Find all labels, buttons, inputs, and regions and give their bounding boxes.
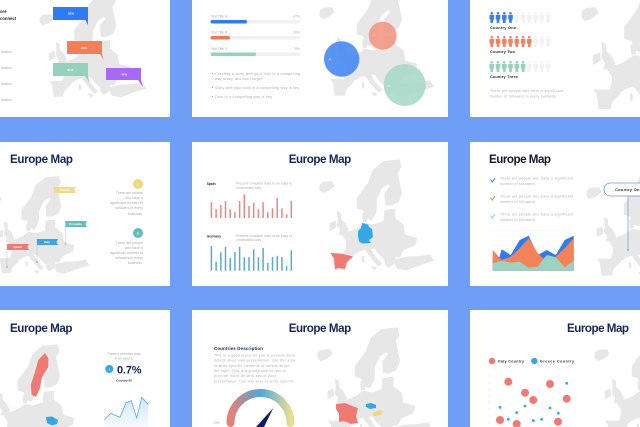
pictogram row: Country Two: Country Two [490, 50, 516, 54]
badge C: C [137, 182, 140, 186]
map of Europe [582, 0, 640, 109]
bullet list [212, 72, 300, 99]
bullet list: Story with your dots in a compelling way is key. [215, 86, 300, 90]
map of Europe [320, 160, 433, 270]
highlight: Germany [358, 223, 373, 244]
highlight: Hungary [372, 410, 383, 416]
bullet list: way is key, and don't forget. [215, 77, 263, 81]
text block C: followers in every [115, 206, 143, 210]
bar chart: Germany [211, 246, 291, 271]
bullet list: Dots in a compelling way is key. [215, 95, 273, 99]
left text labels: rmation [1, 50, 12, 54]
callout: blue [53, 7, 88, 25]
flag: France [54, 187, 76, 193]
panel: checklist and area chart [470, 142, 640, 286]
checklist [490, 178, 495, 218]
callout: Country One [604, 183, 640, 251]
chart heading: Germany: understand way. [236, 238, 262, 242]
scatter: Italy points [496, 378, 571, 427]
bar: title B [210, 30, 300, 40]
chart heading: Germany: Present complete data in an easy to [236, 234, 292, 238]
left text labels: rmation [1, 98, 12, 102]
chart heading: Spain: understand way. [236, 186, 262, 190]
description text: number of followers in every business. [490, 94, 557, 98]
area chart [493, 231, 574, 271]
flag: France: France [60, 188, 70, 192]
heading fragment: ore [0, 9, 7, 14]
callout: purple: 47% [121, 72, 127, 76]
text block C [110, 191, 143, 216]
flag: Italy [36, 239, 58, 263]
title: Europe Map [10, 153, 73, 166]
checklist text: number of followers. [500, 200, 536, 204]
description text: presentation. Use this area to write specific. [214, 380, 295, 384]
title: Europe Map [489, 153, 551, 166]
map of Europe [0, 177, 89, 273]
stat text: Present complete data [108, 352, 141, 356]
chart heading: Germany: Germany [207, 234, 221, 238]
title: Europe Map [289, 322, 351, 335]
title: Europe Map [289, 153, 351, 166]
bubble: orange [369, 22, 397, 50]
description text [490, 89, 563, 98]
flag: Spain [6, 244, 29, 268]
line chart [104, 397, 148, 427]
callout: green: 61% [67, 68, 74, 72]
description text: This is a good place for you to provide more [214, 354, 295, 358]
bar: title A [210, 14, 300, 24]
map of Europe [587, 166, 640, 276]
badge D: D [137, 232, 140, 236]
flag: Romania [65, 221, 87, 245]
badge D [133, 228, 143, 238]
left text labels: rmation [1, 66, 12, 70]
description text [214, 354, 295, 384]
map of Europe [0, 345, 89, 427]
bubble: green [384, 64, 426, 106]
description text: provide more details about your [214, 374, 277, 378]
gauge: 70% [213, 421, 220, 425]
callout: green [53, 63, 90, 83]
highlight: Czechia [366, 403, 376, 409]
highlight: France [336, 403, 358, 424]
callout: purple [106, 68, 143, 87]
description text: the topic. This is a good place for you to [214, 369, 286, 373]
text block C: business. [128, 212, 143, 216]
text block D: who have a [125, 246, 143, 250]
bar: title B: 20% [293, 30, 300, 34]
badge C [133, 179, 143, 189]
title: Europe Map [567, 322, 629, 335]
panel: scatter chart [470, 310, 640, 427]
panel: highlight with stat and line chart [0, 310, 170, 427]
chart heading: Spain: Present complete data in an easy to [236, 182, 292, 186]
bar: title C: Text Title C [211, 47, 228, 51]
pictogram row: Country Three [490, 61, 550, 79]
bar: title C: 70% [293, 47, 300, 51]
description heading: Countries Description [214, 346, 263, 351]
flag: Italy: Italy [44, 240, 50, 244]
text block D: significant number of [110, 251, 143, 255]
panel: flags on map [0, 142, 170, 286]
map of Europe [40, 0, 145, 97]
scatter axis [488, 376, 490, 423]
highlight: Romania [46, 416, 58, 426]
stat caption: Country 00 [116, 378, 132, 382]
gauge [213, 393, 290, 427]
panel: pictograms [470, 0, 640, 117]
chart heading: Germany [207, 234, 292, 242]
bar chart: Spain [211, 194, 291, 218]
map of Europe [595, 328, 640, 427]
pictogram row: Country One: Country One [490, 26, 516, 30]
panel: description and gauge [192, 310, 448, 427]
callout: orange [67, 41, 104, 60]
stat text [108, 352, 141, 360]
flag: Spain: Spain [13, 245, 22, 249]
text block D: business. [128, 261, 143, 265]
pictogram row: Country Two [490, 36, 550, 54]
checklist text: number of followers. [500, 218, 536, 222]
description text: to write specific elements or details about [214, 364, 289, 368]
scatter: Greece points [499, 382, 568, 422]
checklist text [500, 176, 573, 222]
highlight: Sweden [31, 353, 48, 397]
highlight: Spain [331, 253, 353, 270]
chart heading: Spain [207, 182, 292, 190]
legend [489, 358, 574, 364]
checklist text: number of followers. [500, 182, 536, 186]
bullet list: Creating a story with your dots in a compelling [215, 72, 300, 76]
map of Europe [320, 0, 433, 96]
bar: title A: Text Title A [211, 14, 228, 18]
description text: There are people who have a significant [490, 89, 563, 93]
title: Europe Map [10, 322, 72, 335]
text block D: There are people [116, 241, 143, 245]
flag: Romania: Romania [69, 222, 82, 226]
text block C: There are people [116, 191, 143, 195]
callout: blue: 52% [68, 12, 74, 16]
text block C: who have a [125, 196, 143, 200]
panel: callouts on map [0, 0, 170, 117]
text block D [110, 241, 143, 265]
text block C: significant number of [110, 201, 143, 205]
chart heading: Spain: Spain [207, 182, 216, 186]
left text labels [1, 50, 12, 102]
stat value: 0.7% [117, 364, 142, 376]
legend: Italy Country [498, 360, 524, 364]
stat icon: 1 [108, 368, 110, 372]
checklist text: There are people who have a significant [500, 176, 573, 180]
stat icon [105, 365, 113, 373]
checklist text: There are people who have a significant [500, 212, 573, 216]
text block D: followers in every [115, 256, 143, 260]
bubble: blue [324, 41, 359, 77]
callout: orange: 36% [81, 46, 87, 50]
description text: details about your presentation. Use this area [214, 358, 295, 362]
bar: title A: 47% [293, 14, 300, 18]
heading fragment: connect [0, 16, 17, 21]
map of Europe [318, 328, 431, 427]
pictogram row: Country Three: Country Three [490, 75, 518, 79]
stat text: in an easy to [115, 356, 134, 360]
panel: bar charts Spain and Germany [192, 142, 448, 286]
left text labels: rmation [1, 82, 12, 86]
legend: Greece Country [540, 360, 574, 364]
bar: title C [210, 47, 300, 56]
panel: progress bars and bubbles [192, 0, 448, 117]
pictogram row: Country One [490, 12, 550, 30]
bar: title B: Text Title B [211, 30, 228, 34]
checklist text: There are people who have a significant [500, 194, 573, 198]
